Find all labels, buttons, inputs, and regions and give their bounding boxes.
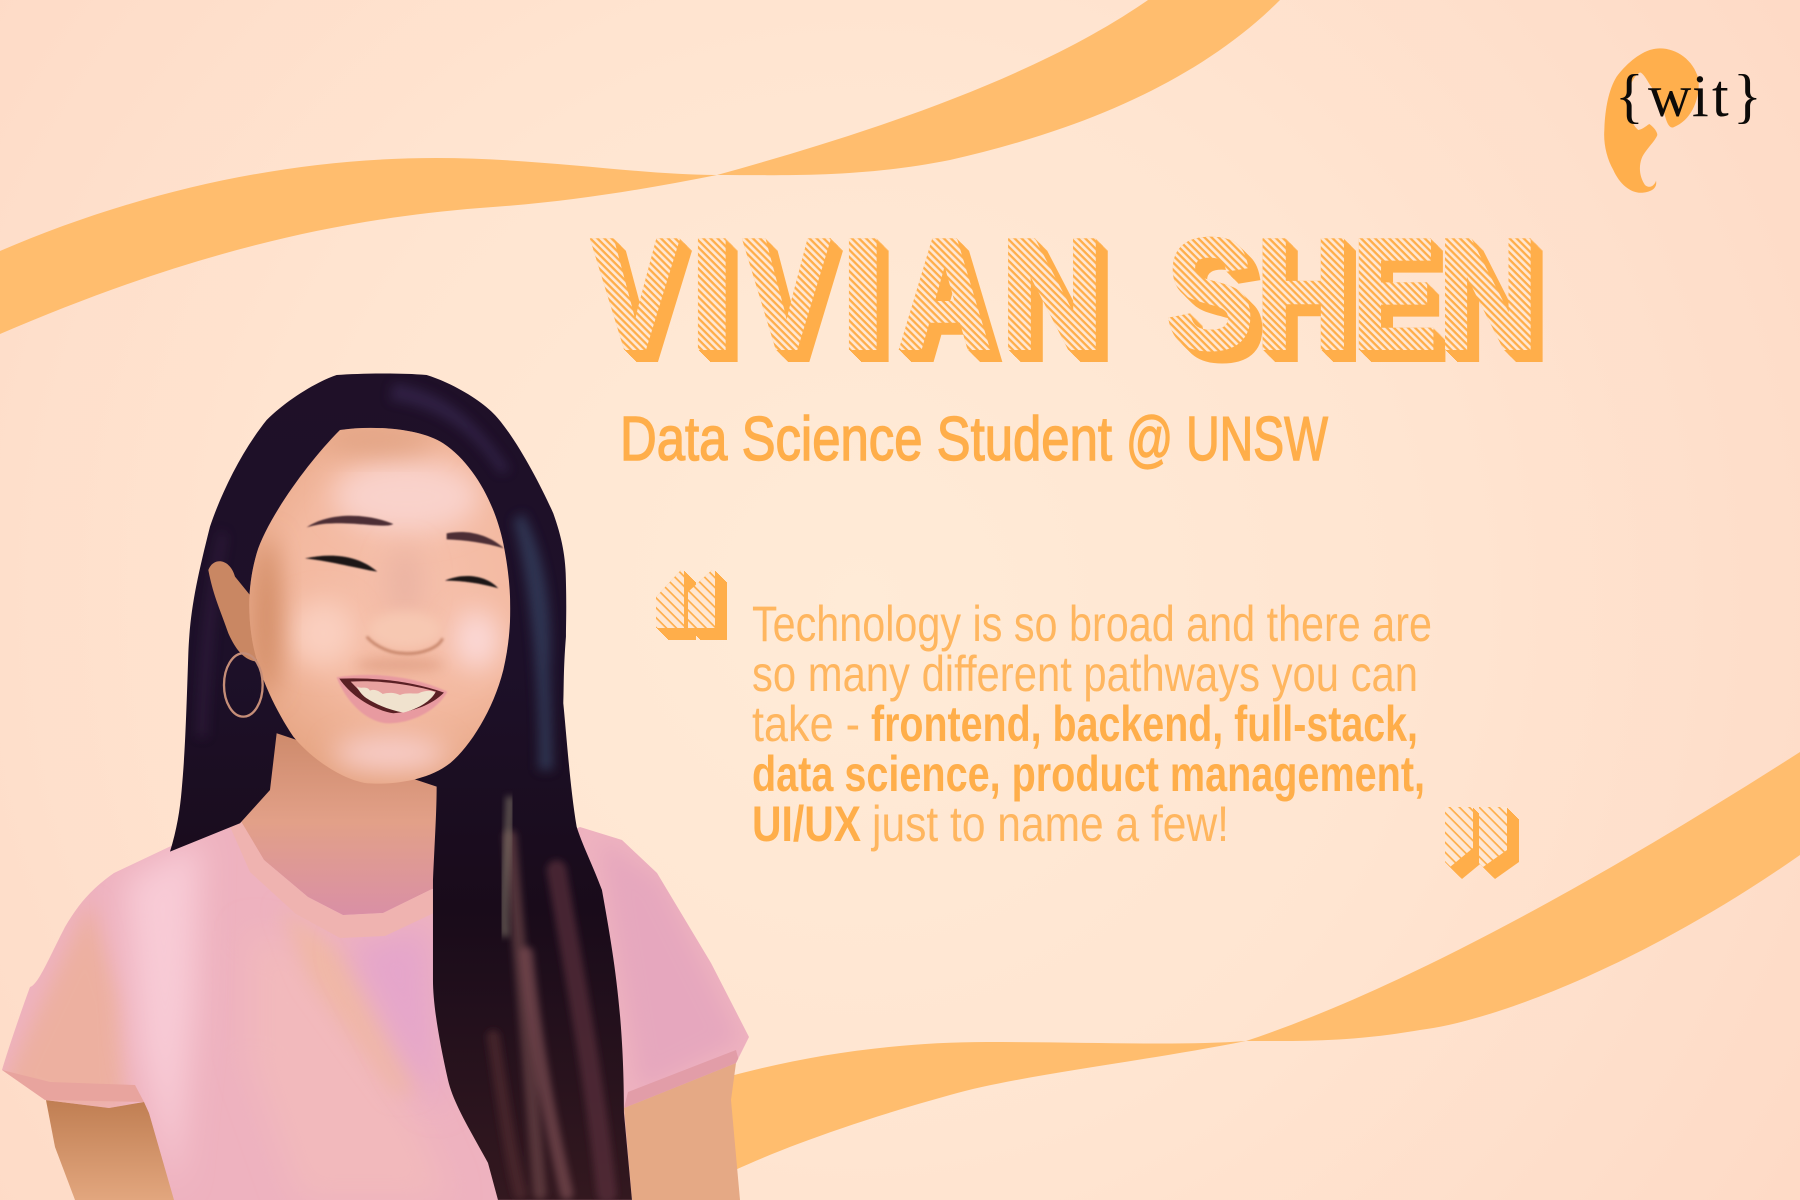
ear [208, 561, 257, 662]
portrait photo [0, 373, 760, 1200]
icon: closing quotation mark [1445, 807, 1507, 867]
shirt [0, 800, 760, 1200]
title: name: N [1001, 208, 1103, 380]
face [208, 423, 517, 790]
head [243, 423, 517, 790]
right arm [620, 1063, 740, 1200]
title: name: V [592, 208, 678, 380]
logo: wit [1604, 48, 1762, 193]
icon: logo blob [1604, 48, 1699, 193]
logo text: { [1615, 63, 1644, 129]
left arm [45, 1095, 180, 1200]
eyes [305, 556, 377, 572]
title: name: I [690, 208, 734, 380]
title: name: V [744, 208, 829, 380]
icon: opening quotation mark [656, 570, 715, 628]
hair [170, 373, 632, 1200]
quote text: so many different pathways you can [752, 646, 1418, 702]
quote text: take - [752, 696, 860, 752]
bottom ribbon [700, 752, 1800, 1185]
collar band [228, 816, 436, 938]
title: name: I [841, 208, 885, 380]
top ribbon [0, 0, 1280, 334]
mouth [337, 675, 447, 723]
title: name: S [1167, 208, 1253, 380]
title: name: A [898, 208, 991, 380]
earring [224, 653, 263, 717]
logo text: t [1712, 63, 1729, 129]
title: name: H [1256, 208, 1351, 380]
logo text: w [1648, 63, 1692, 129]
title: name: E [1352, 208, 1436, 380]
quote text [752, 596, 1432, 852]
quote text: frontend, backend, full-stack, [871, 696, 1418, 752]
subtitle: Data Science Student [620, 405, 1112, 474]
title: name: N [1438, 208, 1538, 380]
quote text: Technology is so broad and there are [752, 596, 1432, 652]
nose [367, 637, 443, 654]
quote text: data science, product management, [752, 746, 1425, 802]
eyebrows [307, 516, 393, 527]
logo text: i [1692, 63, 1709, 129]
teeth [357, 686, 435, 713]
logo text: } [1733, 63, 1762, 129]
subtitle: @ UNSW [1126, 405, 1328, 474]
quote text: just to name a few! [870, 796, 1229, 852]
quote text: UI/UX [752, 796, 861, 852]
neck [235, 690, 460, 930]
